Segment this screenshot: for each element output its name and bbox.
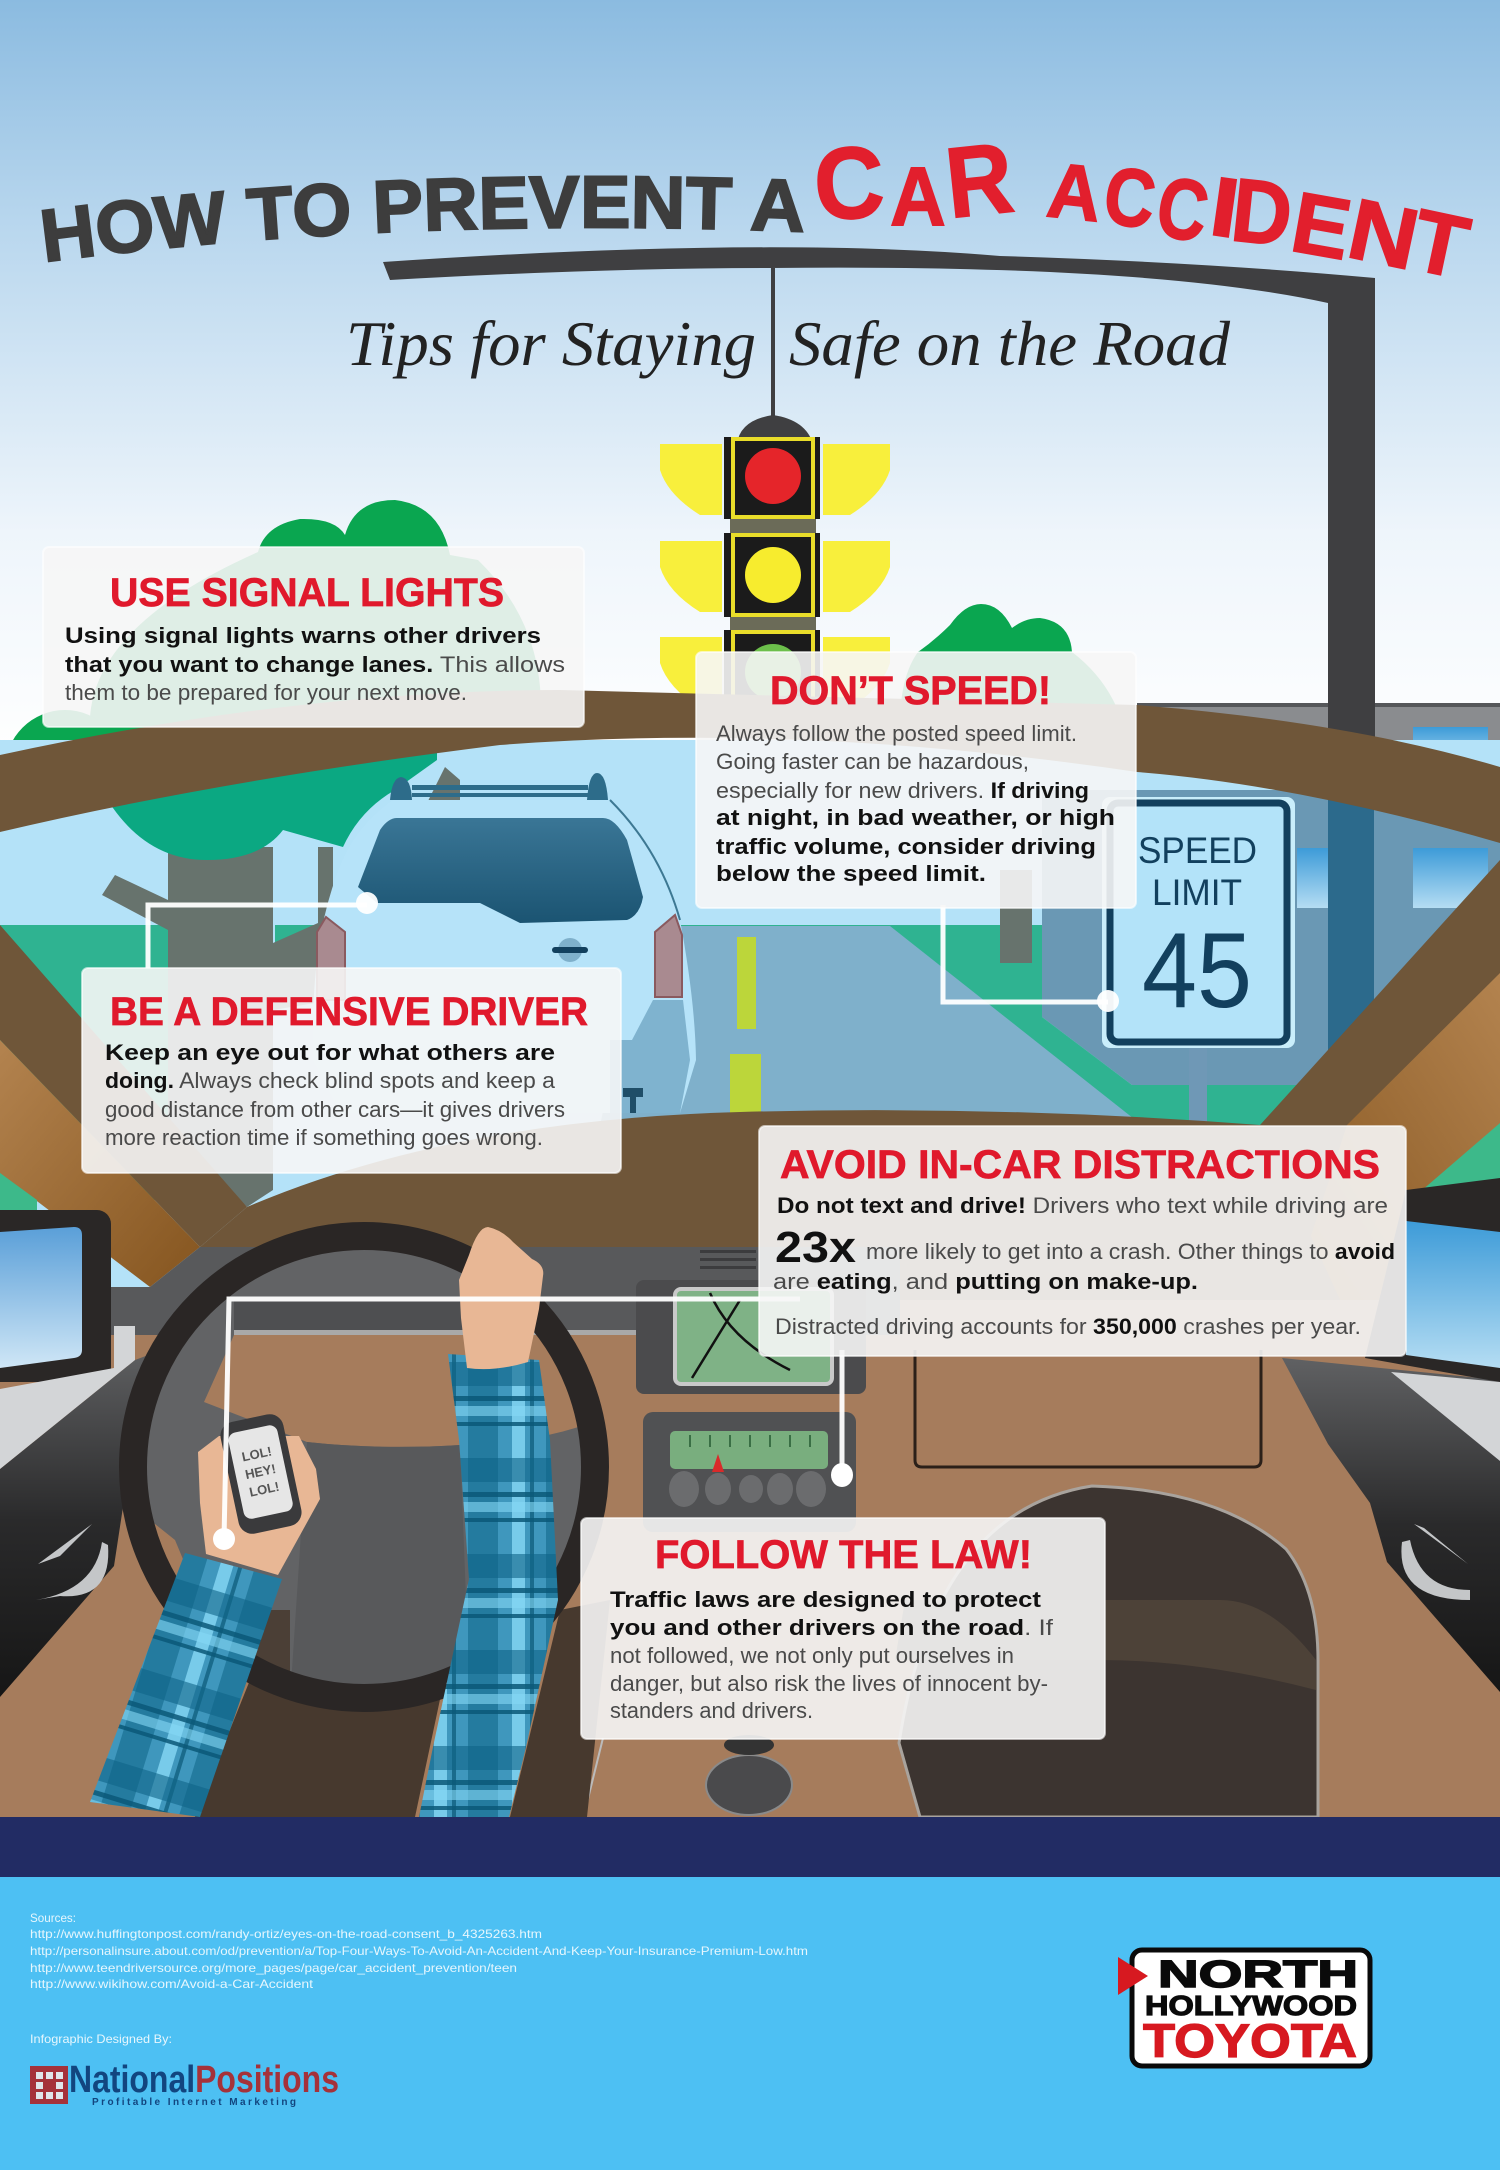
body text: them to be prepared for your next move. xyxy=(65,680,467,705)
phone: LOL! xyxy=(240,1443,273,1464)
title: car accident: R xyxy=(941,122,1018,240)
callout connector: defensive driver xyxy=(148,892,378,968)
sources: http://www.wikihow.com/Avoid-a-Car-Accident xyxy=(30,1977,314,1991)
speed limit sign: SPEED xyxy=(1138,830,1257,871)
heading: FOLLOW THE LAW! xyxy=(655,1533,1032,1577)
north hollywood toyota logo: HOLLYWOOD xyxy=(1145,1990,1357,2021)
tail lights xyxy=(317,915,682,1000)
console edge xyxy=(584,1738,603,1815)
red lamp xyxy=(745,448,801,504)
right arm on the wheel xyxy=(419,1227,558,1817)
left side mirror xyxy=(0,1210,111,1382)
building lower section xyxy=(1042,790,1500,1085)
shifter knob xyxy=(706,1755,792,1815)
navigation screen xyxy=(636,1280,866,1394)
left sleeve xyxy=(90,1553,282,1817)
subtitle: Tips for Staying xyxy=(346,308,756,379)
left hand xyxy=(198,1436,320,1575)
lower dashboard xyxy=(0,1300,1500,1817)
car xyxy=(313,773,696,1113)
title: car accident: N xyxy=(1340,181,1427,289)
wheel rim xyxy=(133,1236,595,1698)
speed limit sign: 45 xyxy=(1142,910,1252,1030)
title: car accident: E xyxy=(1285,174,1358,279)
panel: use signal lights xyxy=(43,547,584,727)
road xyxy=(600,926,1143,1126)
sources: http://personalinsure.about.com/od/prevention/a/Top-Four-Ways-To-Avoid-An-Accident-And-Keep-Your-Insurance-Premium-Low.htm xyxy=(30,1944,808,1958)
right door xyxy=(1282,1178,1500,1692)
vents xyxy=(700,1250,756,1269)
body text: Do not text and drive! Drivers who text while driving are xyxy=(777,1193,1388,1218)
light cable xyxy=(771,268,775,418)
body text: Going faster can be hazardous, xyxy=(716,749,1029,774)
sources xyxy=(30,1911,808,1991)
yellow lamp xyxy=(745,547,801,603)
tree trunks xyxy=(102,767,1032,1207)
callout connector: distractions to phone xyxy=(213,1299,800,1550)
right side mirror xyxy=(1365,1178,1500,1382)
subtitle xyxy=(346,308,1231,379)
sky background xyxy=(0,0,1500,760)
panel: avoid in-car distractions xyxy=(759,1126,1406,1356)
door handle xyxy=(552,938,588,962)
title: car accident: C xyxy=(811,125,887,243)
dashboard top xyxy=(150,1110,1340,1300)
body text: you and other drivers on the road . If xyxy=(610,1615,1054,1640)
title: car accident xyxy=(811,122,1477,298)
north hollywood toyota logo: NORTH xyxy=(1158,1954,1358,1996)
left door xyxy=(0,1210,175,1697)
body text: below the speed limit. xyxy=(716,861,986,886)
title: car accident: A xyxy=(1043,147,1106,239)
national positions logo: Profitable Internet Marketing xyxy=(92,2097,296,2108)
panel: be a defensive driver xyxy=(82,968,621,1173)
subtitle: Safe on the Road xyxy=(789,308,1231,379)
grey dash band xyxy=(0,1247,900,1335)
title: car accident: A xyxy=(890,150,946,244)
car roof band xyxy=(0,690,1500,843)
sign post xyxy=(1189,1048,1207,1128)
traffic light xyxy=(660,268,890,714)
driver body xyxy=(195,1600,610,1817)
lane markings xyxy=(730,937,761,1116)
red needle xyxy=(712,1454,724,1472)
rear window xyxy=(358,818,643,923)
tree foliage through windshield xyxy=(100,740,437,860)
sources: Sources: xyxy=(30,1911,76,1925)
car body xyxy=(313,800,696,1113)
tow hitch xyxy=(623,1088,643,1113)
body text: especially for new drivers. If driving xyxy=(716,778,1089,803)
body text: more reaction time if something goes wrong. xyxy=(105,1125,543,1150)
panel: don't speed xyxy=(696,652,1136,908)
title: car accident: T xyxy=(1404,190,1477,298)
trees above the car roof xyxy=(5,500,1130,830)
body text: good distance from other cars—it gives drivers xyxy=(105,1097,565,1122)
right hand xyxy=(459,1227,543,1369)
navy band xyxy=(0,1817,1500,1877)
body text: Keep an eye out for what others are xyxy=(105,1040,555,1065)
title: car accident: D xyxy=(1227,160,1297,266)
center stack xyxy=(636,1250,1261,1532)
body text xyxy=(65,623,565,705)
radio panel xyxy=(643,1412,856,1532)
body text continued: Distracted driving accounts for 350,000 crashes per year. xyxy=(775,1314,1361,1339)
logo mark xyxy=(30,2066,68,2104)
pole seen through the windshield xyxy=(1328,780,1374,1120)
center console xyxy=(584,1486,1318,1817)
body text: standers and drivers. xyxy=(610,1698,813,1723)
speed limit sign xyxy=(1102,797,1295,1128)
building upper section xyxy=(1137,703,1500,813)
national positions logo: NationalPositions xyxy=(69,2059,339,2101)
left A-pillar xyxy=(0,925,247,1287)
body text xyxy=(716,721,1115,886)
windshield scene xyxy=(0,740,1500,1300)
body text continued: are eating , and putting on make-up. xyxy=(773,1269,1198,1294)
designer credit: Infographic Designed By: xyxy=(30,2032,172,2046)
right sleeve xyxy=(419,1354,558,1817)
heading: BE A DEFENSIVE DRIVER xyxy=(110,990,588,1034)
heading: DON’T SPEED! xyxy=(770,669,1051,713)
traffic signal gantry arm and pole xyxy=(383,247,1375,800)
wheel inner disc xyxy=(139,1242,589,1692)
title: car accident: C xyxy=(1150,158,1215,261)
body text continued xyxy=(773,1239,1395,1339)
body text: doing. Always check blind spots and keep a xyxy=(105,1068,556,1093)
right door panel xyxy=(1391,1372,1500,1461)
left arm holding a phone xyxy=(90,1412,320,1817)
right door handle xyxy=(1401,1524,1470,1600)
body text: Using signal lights warns other drivers xyxy=(65,623,541,648)
building windows xyxy=(1297,848,1488,908)
bumper xyxy=(610,1000,690,1113)
speed limit sign: LIMIT xyxy=(1152,872,1242,913)
body text: traffic volume, consider driving xyxy=(716,834,1096,859)
phone: LOL! xyxy=(248,1479,281,1500)
sources: http://www.huffingtonpost.com/randy-ortiz/eyes-on-the-road-consent_b_4325263.htm xyxy=(30,1927,542,1941)
footer background xyxy=(0,1877,1500,2170)
glove box xyxy=(915,1350,1261,1467)
tinted sky xyxy=(0,740,1500,1300)
body text xyxy=(610,1587,1054,1723)
title: car accident: C xyxy=(1098,149,1161,247)
title: how to prevent a: HOW TO PREVENT A xyxy=(42,176,804,262)
body text continued: more likely to get into a crash. Other things to avoid xyxy=(866,1239,1395,1264)
green lamp xyxy=(745,644,801,700)
north hollywood toyota logo: TOYOTA xyxy=(1143,2014,1357,2067)
body text: Always follow the posted speed limit. xyxy=(716,721,1077,746)
logo arrow xyxy=(1118,1957,1148,1995)
north hollywood toyota logo xyxy=(1118,1950,1370,2067)
phone xyxy=(218,1412,304,1536)
ground xyxy=(0,925,1500,1200)
steering wheel xyxy=(133,1236,600,1700)
body text xyxy=(105,1040,565,1150)
body text: danger, but also risk the lives of innocent by- xyxy=(610,1671,1048,1696)
title: car accident: I xyxy=(1204,159,1245,256)
panel: follow the law xyxy=(581,1518,1105,1739)
callout connector: speed xyxy=(943,905,1119,1012)
national positions logo xyxy=(30,2059,339,2108)
body text: at night, in bad weather, or high xyxy=(716,805,1115,830)
heading: AVOID IN-CAR DISTRACTIONS xyxy=(780,1143,1380,1187)
heading: USE SIGNAL LIGHTS xyxy=(110,571,504,615)
left door panel xyxy=(0,1326,135,1469)
stat: 23x: 23x xyxy=(775,1223,857,1272)
roof rack xyxy=(390,773,608,800)
body text: that you want to change lanes. This allows xyxy=(65,652,565,677)
phone: HEY! xyxy=(244,1461,277,1482)
right A-pillar xyxy=(1200,860,1500,1300)
sources: http://www.teendriversource.org/more_pages/page/car_accident_prevention/teen xyxy=(30,1961,517,1975)
left door handle xyxy=(36,1524,108,1600)
light cap xyxy=(737,415,813,444)
body text: Traffic laws are designed to protect xyxy=(610,1587,1042,1612)
body text: not followed, we not only put ourselves in xyxy=(610,1643,1014,1668)
callout connector: distractions to radio xyxy=(831,1350,853,1487)
